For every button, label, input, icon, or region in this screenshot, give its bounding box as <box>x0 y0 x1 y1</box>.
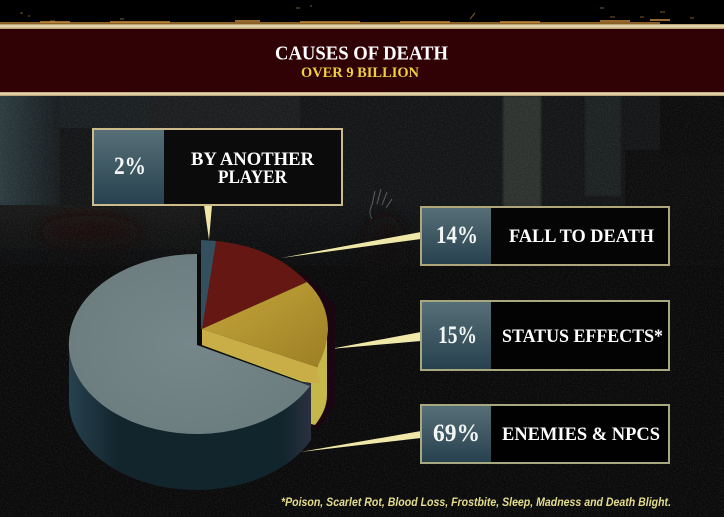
yellow slice top <box>202 282 328 367</box>
percent value: 69% <box>433 420 480 447</box>
callout: fall to death <box>421 207 669 265</box>
blue slice <box>201 240 217 329</box>
yellow slice side <box>202 329 327 425</box>
red slice <box>202 241 307 329</box>
footnote: *Poison, Scarlet Rot, Blood Loss, Frostbite, Sleep, Madness and Death Blight. <box>281 497 671 509</box>
title <box>275 42 448 81</box>
percent value: 15% <box>438 322 477 349</box>
label: ENEMIES & NPCS <box>502 425 660 445</box>
yellow slice cut face <box>202 329 320 383</box>
percent value: 2% <box>114 153 146 180</box>
pointer: fall to death <box>281 232 421 258</box>
pointer: by another player <box>204 205 212 240</box>
callout: by another player <box>93 129 342 205</box>
percent tile <box>422 302 491 369</box>
gap behind slices <box>197 254 202 345</box>
callout: enemies and NPCs <box>421 405 669 463</box>
percent tile <box>422 406 491 462</box>
gray slice top <box>69 254 310 434</box>
header band <box>0 0 724 96</box>
title: CAUSES OF DEATH <box>275 42 448 64</box>
percent value: 14% <box>436 222 478 249</box>
percent tile <box>422 208 491 264</box>
callout: status effects <box>421 301 669 370</box>
pie slice shadow <box>300 270 335 430</box>
label: STATUS EFFECTS* <box>502 327 663 347</box>
pointer: enemies and NPCs <box>300 431 421 452</box>
label second line: PLAYER <box>218 168 288 188</box>
pointer: status effects <box>330 332 421 349</box>
label: FALL TO DEATH <box>509 227 655 247</box>
percent tile <box>94 130 164 204</box>
gray slice side <box>69 345 311 490</box>
subtitle: OVER 9 BILLION <box>301 65 420 81</box>
label: BY ANOTHER <box>191 150 315 170</box>
3D pie chart <box>69 240 335 490</box>
